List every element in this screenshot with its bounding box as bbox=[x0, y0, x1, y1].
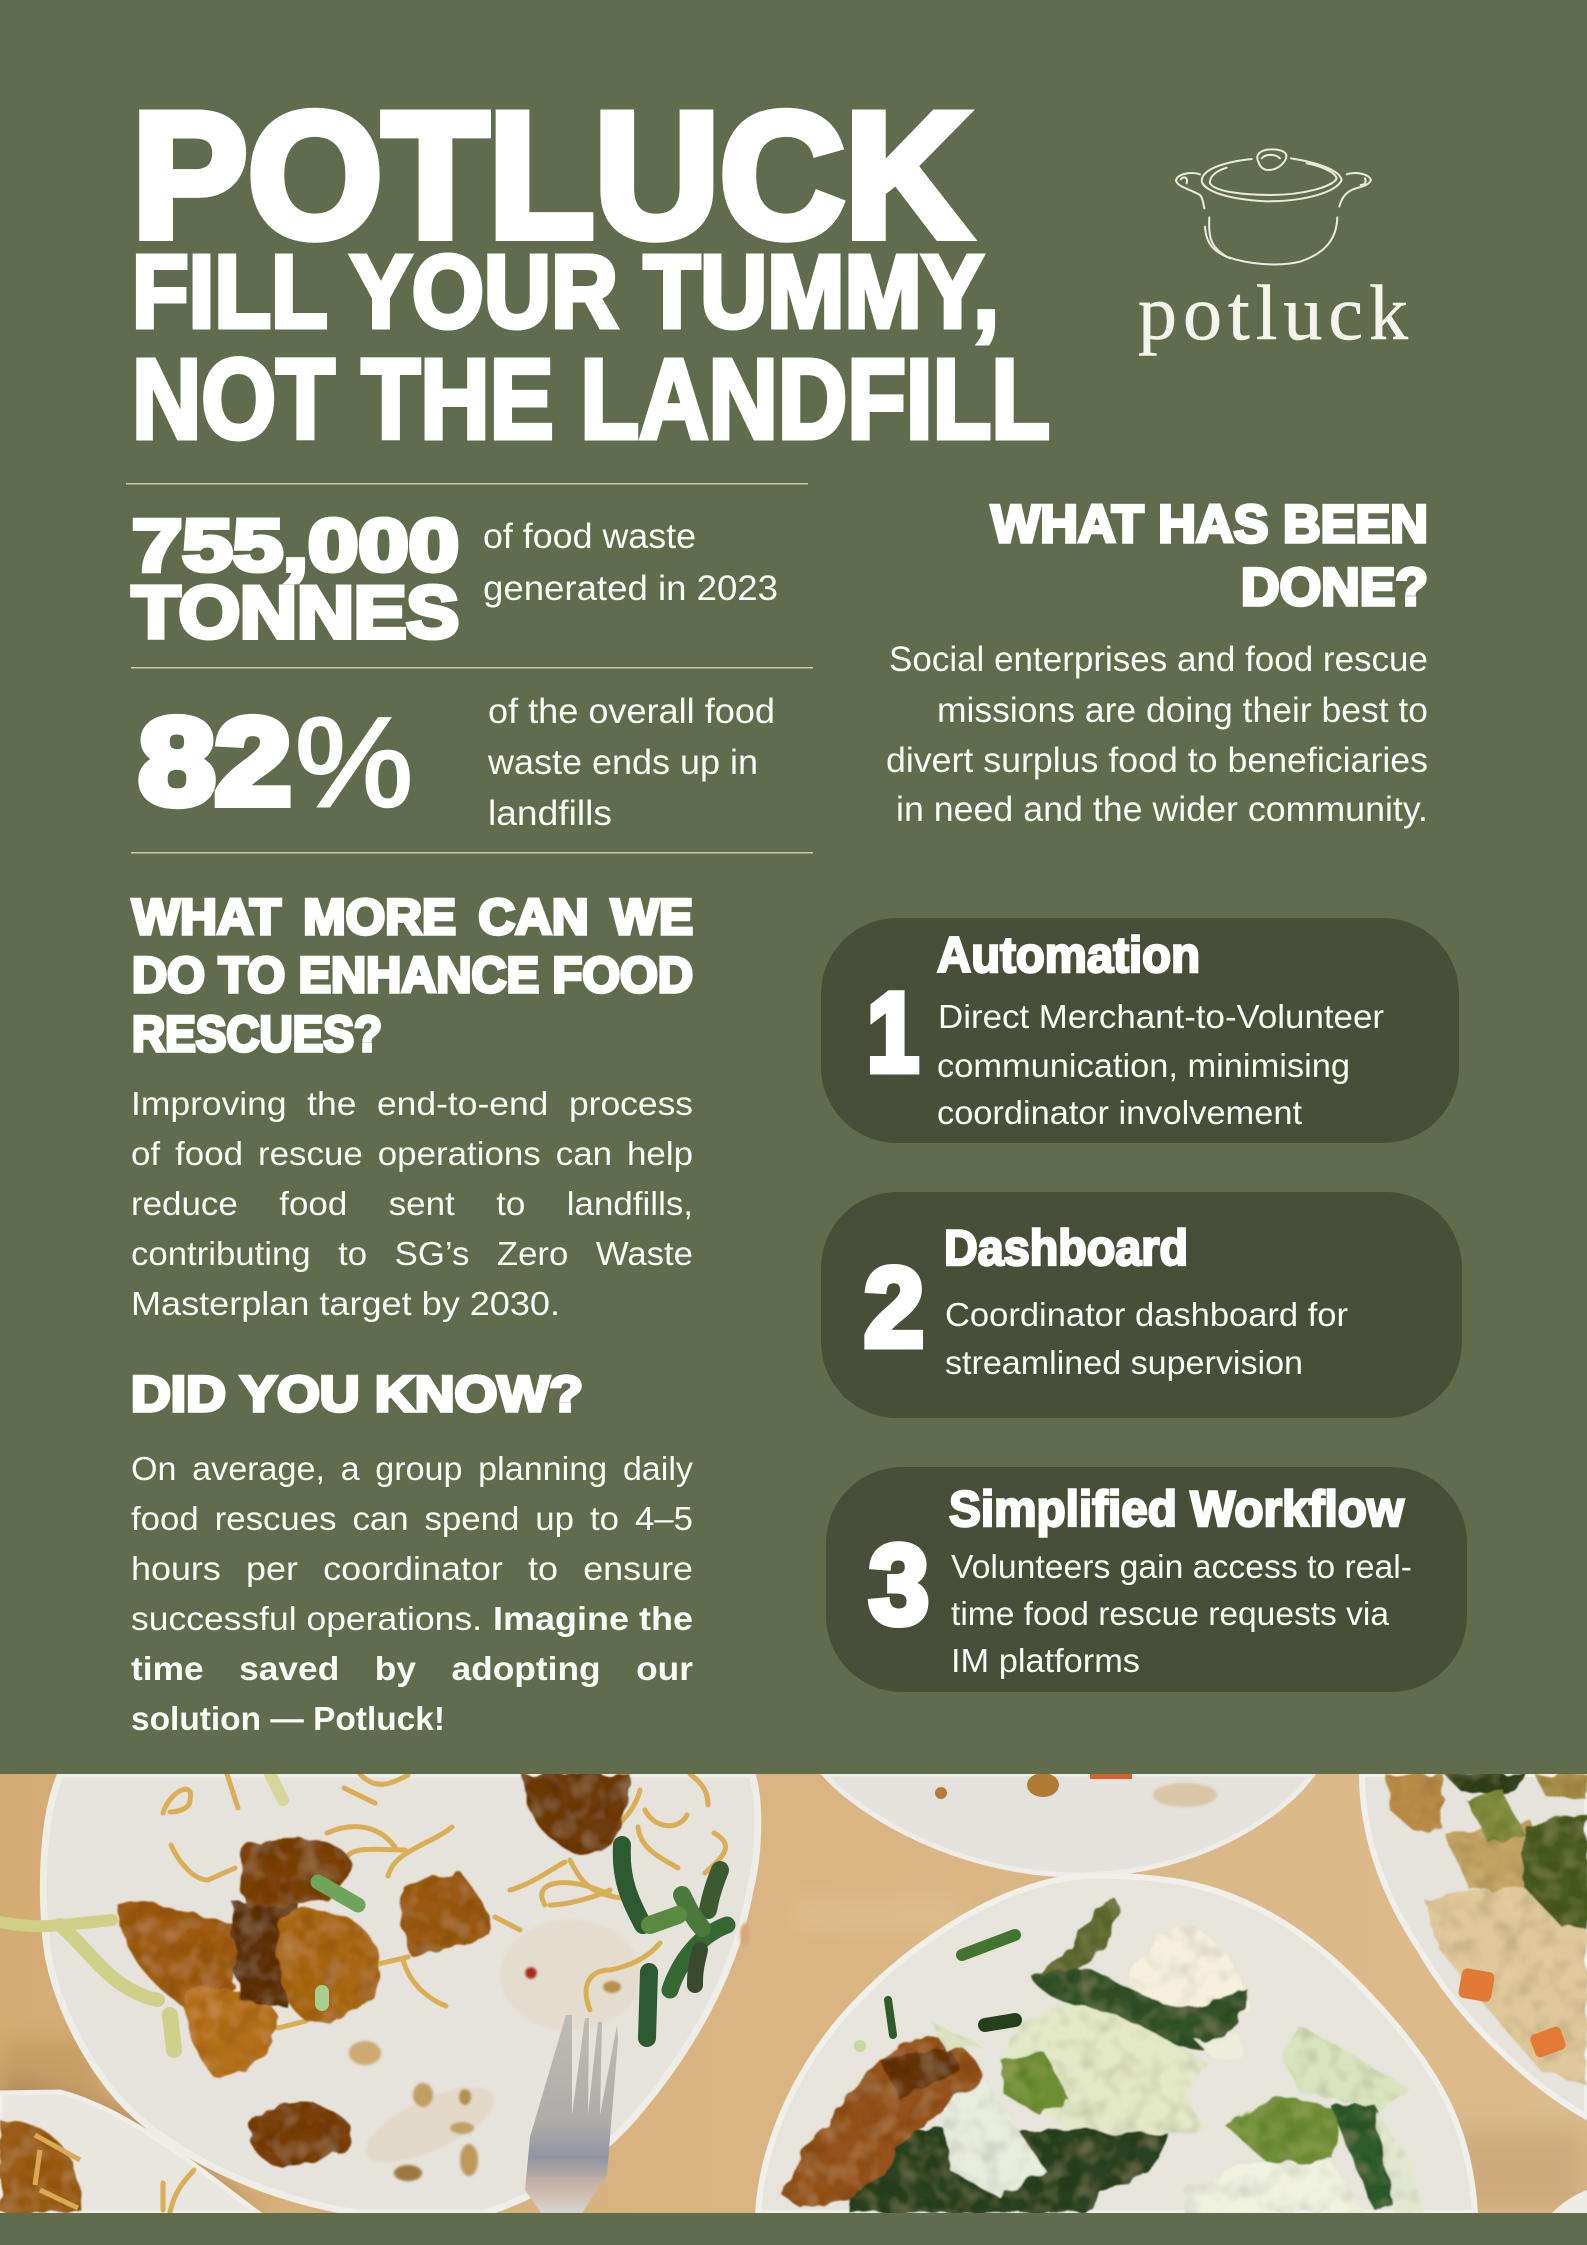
paragraph: on average: hours per coordinator to ensure bbox=[131, 1550, 693, 1587]
card 3: simplified workflow: 3 bbox=[869, 1522, 929, 1647]
card 1: automation: Automation bbox=[937, 927, 1200, 983]
plate: bottom left bbox=[0, 2092, 258, 2213]
card 3: simplified workflow: Volunteers gain access to real- bbox=[951, 1548, 1412, 1585]
paragraph: social enterprises: in need and the wider community. bbox=[896, 790, 1428, 829]
stat text: of food waste generated bbox=[483, 517, 778, 608]
card 1: automation: coordinator involvement bbox=[937, 1094, 1302, 1131]
card 1: automation: 1 bbox=[867, 970, 919, 1095]
subtitle: fill your tummy, not the landfill: FILL YOUR TUMMY, bbox=[132, 234, 999, 349]
paragraph: social enterprises: divert surplus food to beneficiaries bbox=[886, 741, 1428, 780]
plate: vegetables bbox=[758, 1876, 1475, 2213]
card 3: simplified workflow: IM platforms bbox=[951, 1642, 1140, 1679]
title: POTLUCK: POTLUCK bbox=[132, 76, 970, 274]
paragraph: improving the process bbox=[131, 1085, 693, 1322]
noodles and cabbage bbox=[0, 1774, 726, 2050]
stat: 755,000 tonnes: 755,000 bbox=[132, 506, 459, 586]
paragraph: improving the process: Improving the end-to-end process bbox=[131, 1085, 693, 1122]
card 3: simplified workflow bbox=[826, 1467, 1467, 1692]
plate: top centre bbox=[824, 1773, 1313, 1875]
paragraph: on average: On average, a group planning daily bbox=[131, 1450, 694, 1487]
paragraph: on average: time saved by adopting our bbox=[131, 1650, 693, 1687]
card 2: dashboard: Dashboard bbox=[944, 1220, 1188, 1276]
photo: plates of leftover food on wooden table bbox=[0, 1773, 1587, 2213]
plate: bottom right corner bbox=[1552, 2190, 1587, 2213]
card 1: automation: communication, minimising bbox=[937, 1047, 1350, 1084]
stat: 82%: 82 bbox=[139, 694, 291, 830]
subtitle: fill your tummy, not the landfill: NOT THE LANDFILL bbox=[132, 336, 1050, 462]
stat text: of the overall food waste: waste ends up in bbox=[487, 743, 758, 782]
subtitle: fill your tummy, not the landfill bbox=[132, 234, 1050, 462]
paragraph: on average: successful operations. bbox=[131, 1600, 482, 1637]
paragraph: social enterprises: missions are doing their best to bbox=[937, 691, 1428, 730]
icon: cooking pot bbox=[1176, 149, 1371, 264]
paragraph: improving the process: reduce food sent to landfills, bbox=[131, 1185, 693, 1222]
plate: main with chicken bbox=[0, 1774, 758, 2213]
wooden table bbox=[0, 1774, 1587, 2213]
stat: 755,000 tonnes bbox=[132, 506, 459, 654]
card 1: automation: Direct Merchant-to-Volunteer bbox=[938, 998, 1384, 1035]
paragraph: social enterprises: Social enterprises and food rescue bbox=[889, 640, 1428, 679]
heading: what more can we do: RESCUES? bbox=[132, 1006, 382, 1062]
card 2: dashboard bbox=[821, 1192, 1462, 1418]
stat text: of the overall food waste bbox=[487, 692, 775, 833]
stat text: of food waste generated: generated in 2023 bbox=[483, 569, 778, 608]
heading: did you know: DID YOU KNOW? bbox=[131, 1366, 583, 1422]
stat text: of the overall food waste: of the overall food bbox=[488, 692, 775, 731]
paragraph: improving the process: of food rescue operations can help bbox=[131, 1135, 693, 1172]
green beans bbox=[318, 1845, 727, 2038]
paragraph: on average: Imagine the bbox=[493, 1600, 693, 1637]
card 2: dashboard: streamlined supervision bbox=[945, 1344, 1303, 1381]
paragraph: on average bbox=[131, 1450, 694, 1737]
heading: what more can we do: DO TO ENHANCE FOOD bbox=[132, 947, 693, 1003]
heading: what more can we do: WHAT MORE CAN WE bbox=[132, 889, 693, 945]
stat: 82%: % bbox=[295, 691, 413, 833]
paragraph: on average: solution — Potluck! bbox=[131, 1700, 445, 1737]
paragraph: on average: food rescues can spend up to 4–5 bbox=[131, 1500, 693, 1537]
stat: 755,000 tonnes: TONNES bbox=[132, 572, 459, 654]
card 3: simplified workflow: time food rescue requests via bbox=[951, 1595, 1390, 1632]
paragraph: improving the process: Masterplan target by 2030. bbox=[131, 1285, 560, 1322]
stat: 82% bbox=[139, 691, 413, 833]
card 3: simplified workflow: Simplified Workflow bbox=[949, 1481, 1404, 1537]
logo wordmark: potluck bbox=[1138, 269, 1408, 356]
paragraph: improving the process: contributing to SG’s Zero Waste bbox=[131, 1235, 693, 1272]
card 2: dashboard: Coordinator dashboard for bbox=[945, 1296, 1348, 1333]
chicken pieces bbox=[118, 1774, 630, 2165]
stat text: of food waste generated: of food waste bbox=[483, 517, 696, 556]
card 2: dashboard: 2 bbox=[864, 1245, 924, 1370]
card 1: automation bbox=[821, 918, 1459, 1143]
heading: what has been done: DONE? bbox=[1241, 558, 1428, 617]
heading: what more can we do bbox=[132, 889, 693, 1062]
plate: right with rice bbox=[1362, 1774, 1587, 2117]
paragraph: social enterprises bbox=[886, 640, 1428, 829]
heading: what has been done bbox=[991, 495, 1428, 617]
fork bbox=[525, 2015, 618, 2213]
logo: potluck cooking pot and wordmark bbox=[1138, 149, 1408, 356]
stat text: of the overall food waste: landfills bbox=[488, 794, 612, 833]
heading: what has been done: WHAT HAS BEEN bbox=[991, 495, 1428, 554]
